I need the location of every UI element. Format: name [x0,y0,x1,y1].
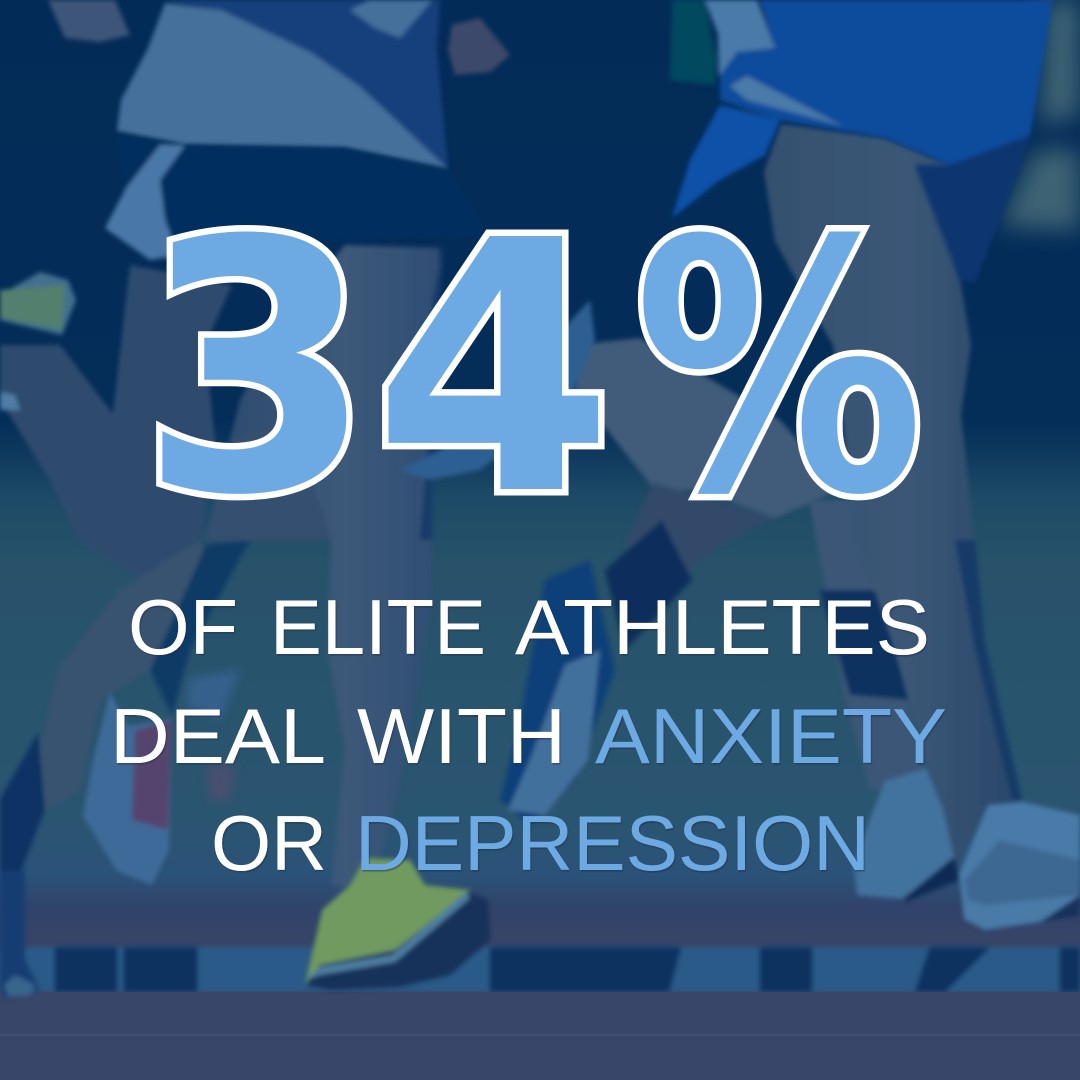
line 1 [128,583,930,671]
runner left: shirt [48,0,510,169]
runner left: front thigh and shin [205,240,445,890]
big statistic: 34% [140,167,924,571]
digit 3: 3 [140,167,373,571]
line 1: ATHLETES [515,583,930,671]
line 1: OF [128,583,238,671]
runner right: white shoe [854,768,960,902]
runner right: front thigh and shin [764,124,1022,870]
line 2: DEAL [110,692,326,780]
runner left: shorts [105,135,490,262]
runner right: trailing thigh and calf [575,338,840,650]
runner right: blue shoe [959,802,1080,930]
runner right: rear shin [809,500,930,790]
runner right: kit [670,0,1053,283]
line 2: ANXIETY [595,692,947,780]
percent sign: % [634,167,924,571]
runner left: second calf [0,540,250,998]
runner left: rear shoe behind the four [400,300,595,480]
line 3: OR [211,799,327,887]
line 2 [110,692,947,780]
runner left: raised rear leg and shoe [0,265,232,583]
line 3: DEPRESSION [355,799,870,887]
runner left: white and red shoe [83,670,240,885]
line 2: WITH [357,692,566,780]
caption text [110,583,947,887]
digit 4: 4 [373,167,614,571]
runner right: blue trailing shoe [500,560,615,825]
line 1: ELITE [270,583,486,671]
runner left: green spiked shoe [305,858,490,990]
